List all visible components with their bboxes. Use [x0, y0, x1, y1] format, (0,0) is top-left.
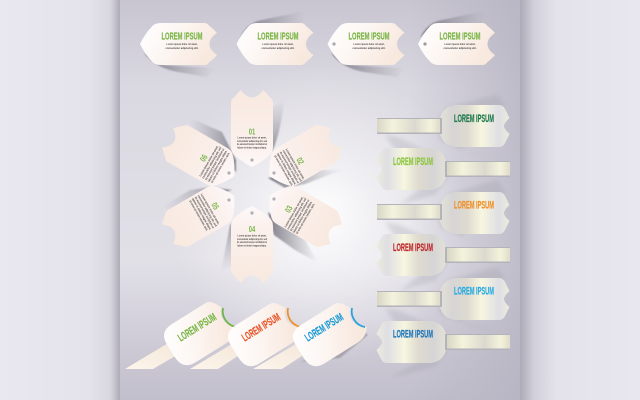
petal 02: Lorem ipsum dolor sit amet,	[285, 148, 306, 180]
petal 05: 05	[209, 201, 221, 211]
petal 02: consectetur adipiscing elit, sed	[282, 149, 303, 182]
petal 06: consectetur adipiscing elit, sed	[201, 146, 222, 179]
petal 06	[157, 120, 245, 194]
tag 2: Lorem ipsum dolor sit amet,	[262, 42, 294, 46]
tag 1: consectetur adipiscing elit.	[166, 46, 199, 50]
tag 3: consectetur adipiscing elit.	[352, 46, 386, 50]
tag 4	[418, 11, 495, 65]
metal tag 6: LOREM IPSUM	[393, 328, 433, 340]
petal 01: 01	[249, 126, 255, 136]
tag 1: Lorem ipsum dolor sit amet,	[166, 42, 198, 46]
tag 3: LOREM IPSUM	[348, 30, 390, 42]
metal tag 1: LOREM IPSUM	[454, 113, 494, 125]
petal 05: do eiusmod tempor incididunt ut	[194, 196, 215, 229]
petal 03: Ut enim ad minim veniam, quis.	[295, 202, 316, 235]
metal tag 1	[377, 95, 510, 160]
angled tag 2: LOREM IPSUM	[240, 311, 283, 344]
petal 01: labore et dolore magna aliqua.	[238, 145, 267, 149]
metal tag 5	[377, 267, 510, 332]
metallic tags column	[376, 95, 510, 378]
petal 03: labore et dolore magna aliqua.	[292, 200, 313, 234]
petal 02: labore et dolore magna aliqua.	[276, 152, 297, 186]
metal tag 3	[377, 180, 510, 247]
petal 04: 04	[249, 224, 255, 234]
tag 4: Lorem ipsum dolor sit amet,	[444, 42, 476, 46]
petal 04: labore et dolore magna aliqua.	[238, 243, 267, 247]
angled bottom tags	[125, 295, 371, 371]
petal 03: do eiusmod tempor incididunt ut	[289, 199, 310, 232]
petal 05: consectetur adipiscing elit, sed	[197, 194, 218, 227]
petal 06: do eiusmod tempor incididunt ut	[204, 148, 225, 181]
angled tag 1	[125, 295, 242, 370]
petal 06: Lorem ipsum dolor sit amet,	[198, 145, 219, 177]
petal 02	[259, 120, 347, 194]
angled tag 3: LOREM IPSUM	[303, 311, 346, 344]
tag 2: consectetur adipiscing elit.	[262, 46, 295, 50]
petal 06: 06	[198, 153, 210, 163]
metal tag 5: LOREM IPSUM	[454, 286, 494, 298]
top row of tags	[140, 11, 495, 77]
petal 03: Lorem ipsum dolor sit amet,	[283, 196, 304, 228]
petal 01	[231, 90, 273, 167]
angled tag 1: LOREM IPSUM	[176, 311, 219, 344]
petal 02: Ut enim ad minim veniam, quis.	[273, 154, 294, 187]
tag 2	[236, 11, 314, 65]
petal 06: labore et dolore magna aliqua.	[207, 149, 228, 183]
tag 3: Lorem ipsum dolor sit amet,	[354, 42, 385, 46]
petal 01: Lorem ipsum dolor sit amet,	[238, 136, 267, 140]
petal 05: labore et dolore magna aliqua.	[191, 197, 212, 231]
petal 03: 03	[283, 204, 295, 214]
petal 05: Lorem ipsum dolor sit amet,	[200, 193, 221, 225]
petal 02: do eiusmod tempor incididunt ut	[279, 151, 300, 184]
angled tag 2	[190, 296, 306, 371]
tag 1	[140, 23, 217, 77]
flower of six numbered tags	[157, 90, 347, 283]
petal shadows	[163, 100, 342, 272]
tag 4: consectetur adipiscing elit.	[444, 46, 477, 50]
petal 04: do eiusmod tempor incididunt ut	[237, 240, 267, 244]
metal tag 6	[376, 308, 510, 378]
metal tag 3: LOREM IPSUM	[454, 200, 494, 212]
petal 03: consectetur adipiscing elit, sed	[286, 197, 307, 230]
petal 01: do eiusmod tempor incididunt ut	[237, 142, 267, 146]
petal 03	[259, 178, 347, 252]
metal tag 4	[376, 222, 510, 291]
tag 1: LOREM IPSUM	[162, 30, 203, 42]
tag 2: LOREM IPSUM	[258, 30, 299, 42]
tag 3	[328, 23, 405, 77]
metal tag 2: LOREM IPSUM	[393, 156, 433, 168]
petal 02: 02	[294, 156, 306, 166]
tag 4: LOREM IPSUM	[440, 30, 481, 42]
petal 06: Ut enim ad minim veniam, quis.	[210, 151, 231, 184]
petal 05: Ut enim ad minim veniam, quis.	[188, 199, 209, 232]
metal tag 4: LOREM IPSUM	[393, 242, 433, 254]
angled tag 3	[253, 296, 371, 371]
petal 04: consectetur adipiscing elit, sed	[237, 237, 267, 241]
petal 01: consectetur adipiscing elit, sed	[237, 139, 267, 143]
metal tag 2	[376, 135, 510, 205]
petal 04	[231, 206, 273, 283]
petal 04: Lorem ipsum dolor sit amet,	[238, 234, 267, 238]
petal 05	[157, 178, 245, 252]
